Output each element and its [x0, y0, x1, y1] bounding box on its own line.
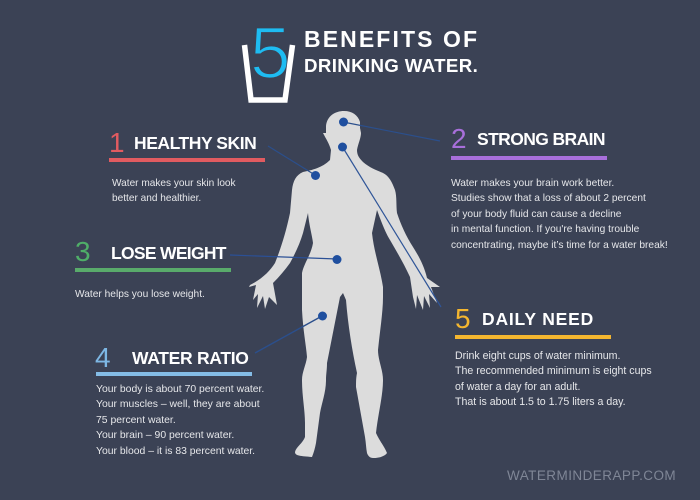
- text: [455, 350, 652, 408]
- number 5: 5: [455, 303, 471, 334]
- number 4: 4: [95, 342, 111, 373]
- connector: healthy skin: [268, 146, 315, 175]
- title: BENEFITS OF: [304, 26, 479, 52]
- numeral 5 in glass: 5: [250, 13, 291, 94]
- text: Drink eight cups of water minimum.: [455, 350, 620, 362]
- heading: HEALTHY SKIN: [134, 133, 256, 153]
- number 2: 2: [451, 123, 467, 154]
- text: of water a day for an adult.: [455, 381, 580, 393]
- marker dots: [311, 118, 348, 320]
- title: [304, 26, 479, 76]
- panel: water ratio: [95, 342, 264, 457]
- icon: human silhouette: [249, 111, 440, 458]
- text: concentrating, maybe it’s time for a water break!: [451, 240, 668, 251]
- connector: daily need: [342, 147, 441, 307]
- panel: daily need: [455, 303, 652, 408]
- text: Studies show that a loss of about 2 percent: [451, 193, 646, 204]
- text: Water helps you lose weight.: [75, 289, 205, 300]
- text: in mental function. If you're having trouble: [451, 224, 639, 235]
- heading: WATER RATIO: [132, 348, 249, 368]
- text: Your brain – 90 percent water.: [96, 430, 234, 441]
- underline: [75, 268, 231, 272]
- panel: strong brain: [451, 123, 668, 251]
- footer url: WATERMINDERAPP.COM: [507, 468, 676, 483]
- connector: strong brain: [343, 122, 440, 141]
- panel: healthy skin: [109, 127, 265, 204]
- underline: [109, 158, 265, 162]
- text: [96, 384, 264, 457]
- text: Water makes your skin look: [112, 178, 236, 189]
- heading: STRONG BRAIN: [477, 129, 605, 149]
- underline: [455, 335, 611, 338]
- icon: glass: [244, 45, 292, 100]
- connector: lose weight: [230, 255, 337, 259]
- connector: water ratio: [255, 316, 322, 353]
- text: Your muscles – well, they are about: [96, 399, 260, 410]
- underline: [451, 156, 607, 160]
- text: Your blood – it is 83 percent water.: [96, 446, 255, 457]
- text: of your body fluid can cause a decline: [451, 209, 621, 220]
- text: 75 percent water.: [96, 415, 176, 426]
- title: DRINKING WATER.: [304, 55, 478, 76]
- text: Your body is about 70 percent water.: [96, 384, 264, 395]
- underline: [96, 372, 252, 376]
- text: better and healthier.: [112, 193, 201, 204]
- panel: lose weight: [75, 236, 231, 300]
- text: The recommended minimum is eight cups: [455, 365, 652, 377]
- heading: DAILY NEED: [482, 309, 594, 329]
- text: [451, 178, 668, 251]
- text: [112, 178, 236, 204]
- heading: LOSE WEIGHT: [111, 243, 226, 263]
- number 1: 1: [109, 127, 125, 158]
- number 3: 3: [75, 236, 91, 267]
- text: That is about 1.5 to 1.75 liters a day.: [455, 396, 626, 408]
- text: Water makes your brain work better.: [451, 178, 614, 189]
